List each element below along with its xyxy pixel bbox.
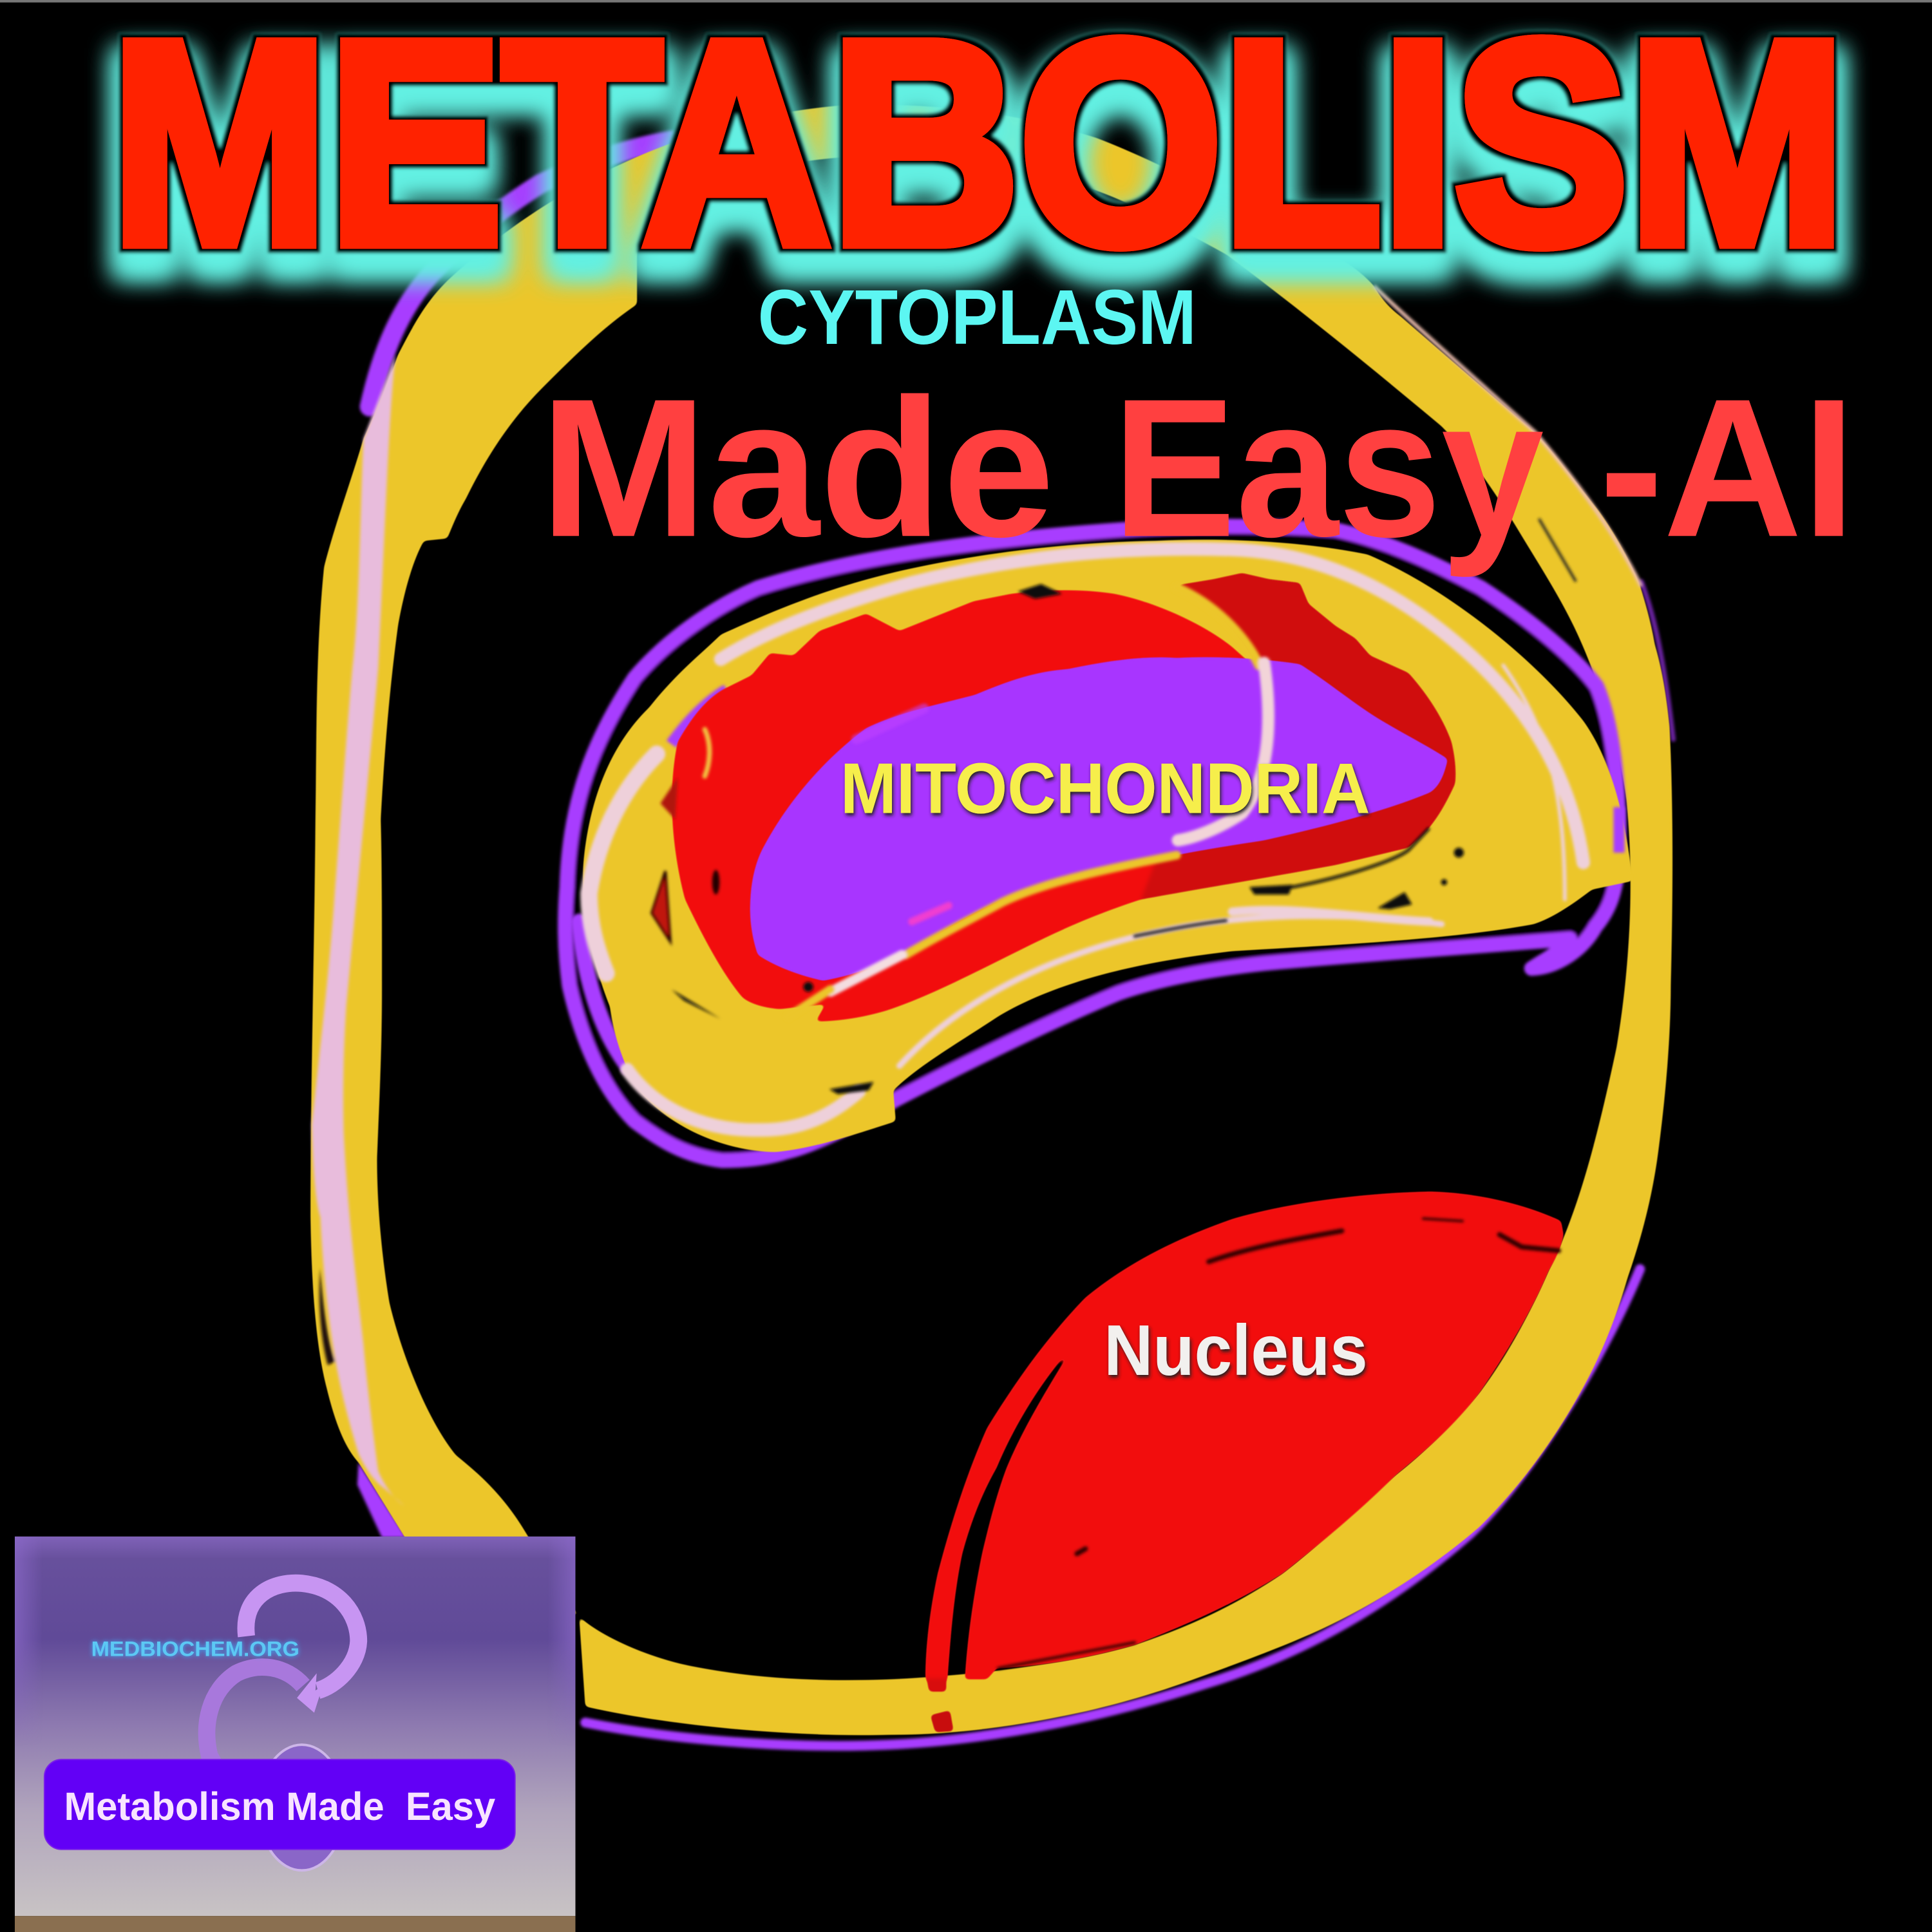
mitochondrion purple stripe above matrix — [672, 690, 727, 744]
mitochondrion dark specks and wedges — [652, 584, 1619, 1094]
subtitle: Made Easy -AI: Easy — [1113, 357, 1545, 579]
subtitle: Made Easy -AI: Made — [540, 357, 1055, 578]
logo lower arrow — [207, 1667, 303, 1765]
mitochondrion inner detail lines — [705, 588, 1268, 1016]
mitochondrion pale pink membrane — [589, 549, 1584, 1130]
label: CYTOPLASM: CYTOPLASM — [758, 274, 1197, 361]
cell yellow membrane ring — [310, 104, 1672, 1735]
label: MITOCHONDRIA: MITOCHONDRIA — [840, 749, 1370, 829]
logo banner — [44, 1759, 515, 1850]
nucleus dark marks — [998, 1218, 1558, 1669]
mitochondrion secondary purple line — [579, 922, 629, 1067]
subtitle: Made Easy -AI — [540, 357, 1855, 579]
subtitle: Made Easy -AI: -AI — [1599, 357, 1855, 578]
mitochondrion purple lumen — [750, 657, 1448, 981]
logo lower circle — [259, 1745, 345, 1870]
logo panel — [15, 1537, 575, 1932]
mitochondrion — [565, 526, 1633, 1160]
logo upper arrow — [246, 1583, 359, 1712]
mitochondrion purple outer membrane — [565, 526, 1619, 1160]
nucleus — [925, 1191, 1564, 1732]
nucleus red shape — [925, 1191, 1564, 1732]
top edge bar — [0, 0, 1932, 3]
mitochondrion yellow layer — [583, 540, 1633, 1152]
logo banner: Metabolism Made Easy — [64, 1785, 495, 1828]
label: Nucleus: Nucleus — [1104, 1311, 1368, 1390]
logo url text: MEDBIOCHEM.ORG — [91, 1637, 299, 1660]
wood strip — [15, 1916, 575, 1932]
cell pale pink band — [312, 286, 1641, 1506]
logo background — [15, 1537, 575, 1916]
logo side vignette — [15, 1537, 576, 1705]
mitochondrion red matrix — [672, 573, 1455, 1021]
cell outer purple membrane — [357, 140, 1673, 1746]
